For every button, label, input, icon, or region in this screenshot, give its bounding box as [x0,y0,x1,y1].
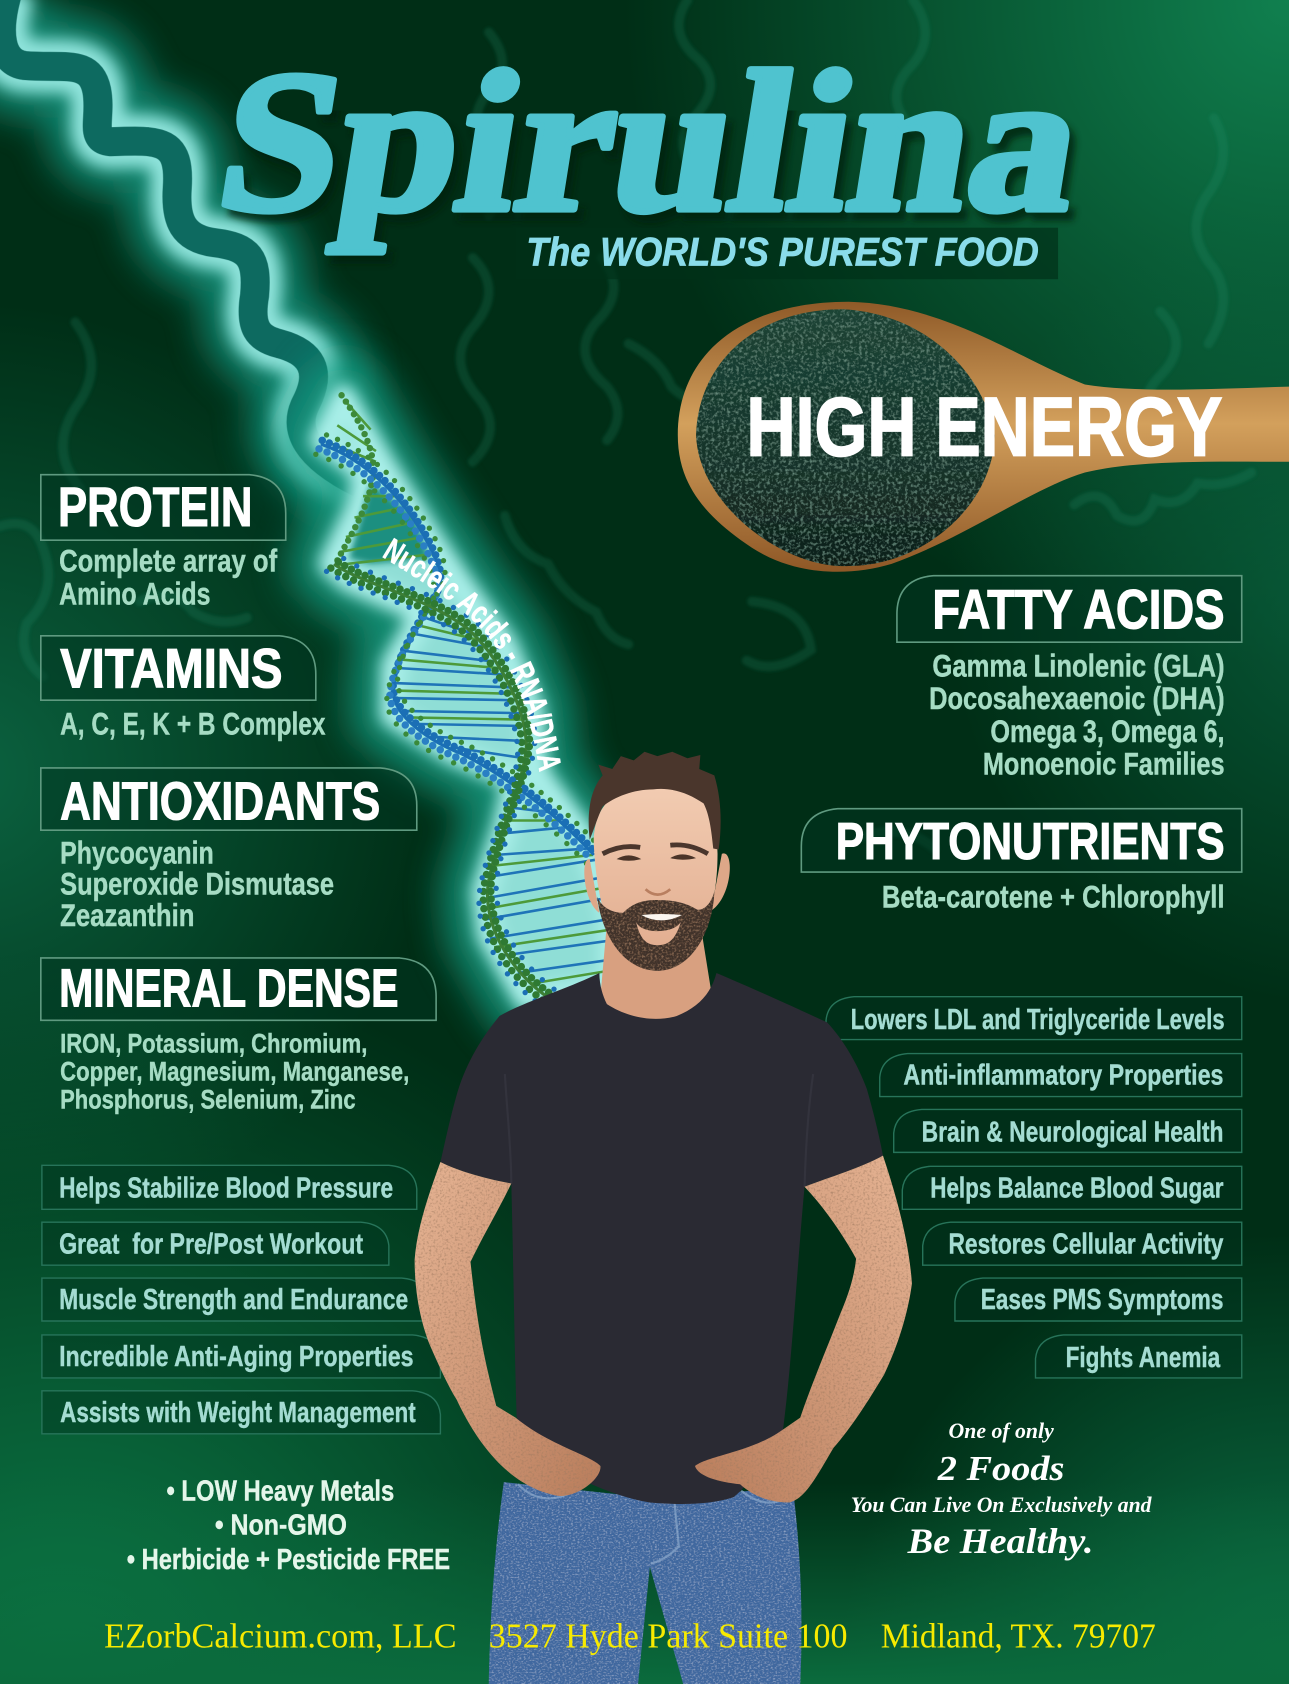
jeans pocket and fly seams [518,1484,790,1564]
panel: antioxidants [41,768,417,933]
panel: protein: PROTEIN [58,475,252,538]
footer address: EZorbCalcium.com, LLC [104,1617,457,1655]
panel: phytonutrients [801,809,1242,915]
panel: mineral dense: IRON, Potassium, Chromium, [60,1029,367,1058]
title: Spirulina [212,38,1103,262]
panel: vitamins [41,636,326,742]
panel: protein [41,475,286,612]
eyes and brows [603,845,708,854]
panel: antioxidants: Phycocyanin [60,835,214,870]
blue strand beads [316,435,597,863]
bullet list: purity claims: • Herbicide + Pesticide FREE [127,1544,450,1576]
faint spirulina squiggles [0,0,1251,848]
panel: fatty acids: FATTY ACIDS [932,577,1225,640]
panel: protein: Complete array of [59,543,278,578]
face [594,784,718,971]
panel: protein: Amino Acids [59,577,211,612]
nose [646,889,670,895]
green strand beads [327,558,559,1005]
right benefit list [826,997,1242,1378]
panel: mineral dense: Phosphorus, Selenium, Zinc [60,1084,356,1114]
quote: one of only two foods: You Can Live On Exclusively and [851,1492,1152,1517]
right benefit list: Restores Cellular Activity [948,1228,1223,1260]
beard [597,891,714,971]
hair [589,752,721,850]
right arm [695,1156,912,1502]
panel: antioxidants: Superoxide Dismutase [60,867,334,902]
right benefit list: Fights Anemia [1066,1342,1221,1374]
ears [584,853,730,913]
footer address [104,1617,1156,1655]
quote: one of only two foods [851,1418,1152,1561]
panel: antioxidants: ANTIOXIDANTS [60,771,380,831]
icon: wooden spoon of spirulina powder [678,302,1289,572]
spiral ribbon with glow [2,0,360,483]
panel: fatty acids: Docosahexaenoic (DHA) [929,681,1225,716]
quote: one of only two foods: 2 Foods [937,1450,1064,1488]
DNA rungs [329,400,608,984]
quote: one of only two foods: One of only [948,1418,1055,1443]
panel: mineral dense [41,958,436,1114]
panel: fatty acids: Gamma Linolenic (GLA) [932,649,1225,684]
panel: mineral dense: MINERAL DENSE [59,958,399,1018]
man portrait [415,752,912,1684]
left benefit list: Muscle Strength and Endurance [59,1284,408,1316]
panel: fatty acids [897,576,1242,781]
mouth teeth [641,914,682,920]
panel: fatty acids: Omega 3, Omega 6, [990,714,1225,749]
spoon powder [696,309,995,566]
left benefit list: Helps Stabilize Blood Pressure [59,1172,393,1204]
panel: antioxidants: Zeazanthin [60,898,194,933]
jeans [489,1482,801,1684]
DNA glow halo [322,397,612,999]
footer address: 3527 Hyde Park Suite 100 [489,1617,848,1655]
panel: vitamins: VITAMINS [60,636,283,699]
title: Spirulina [206,30,1096,253]
left benefit list [42,1165,440,1434]
curved label: Nucleic Acids - RNA/DNA: Nucleic Acids - RNA/DNA [382,538,561,772]
bullet list: purity claims: • LOW Heavy Metals [166,1475,394,1507]
bullet list: purity claims [127,1475,450,1576]
panel: mineral dense: Copper, Magnesium, Manganese, [60,1056,409,1086]
left benefit list: Great for Pre/Post Workout [59,1228,363,1260]
left benefit list: Assists with Weight Management [60,1397,416,1429]
panel: fatty acids: Monoenoic Families [983,746,1225,781]
left arm [415,1162,600,1496]
neck [597,924,718,1031]
right benefit list: Eases PMS Symptoms [981,1284,1223,1316]
bullet list: purity claims: • Non-GMO [215,1510,347,1542]
quote: one of only two foods: Be Healthy. [907,1521,1094,1561]
panel: phytonutrients: Beta-carotene + Chlorophyll [882,880,1225,915]
tagline: The WORLD'S PUREST FOOD [526,230,1039,274]
DNA double helix [316,395,608,1005]
t-shirt [440,973,883,1504]
panel: vitamins: A, C, E, K + B Complex [60,707,326,742]
shirt sleeve seams [505,1074,813,1187]
thin top strand [335,395,373,565]
footer address: Midland, TX. 79707 [881,1617,1156,1655]
left benefit list: Incredible Anti-Aging Properties [59,1341,414,1373]
